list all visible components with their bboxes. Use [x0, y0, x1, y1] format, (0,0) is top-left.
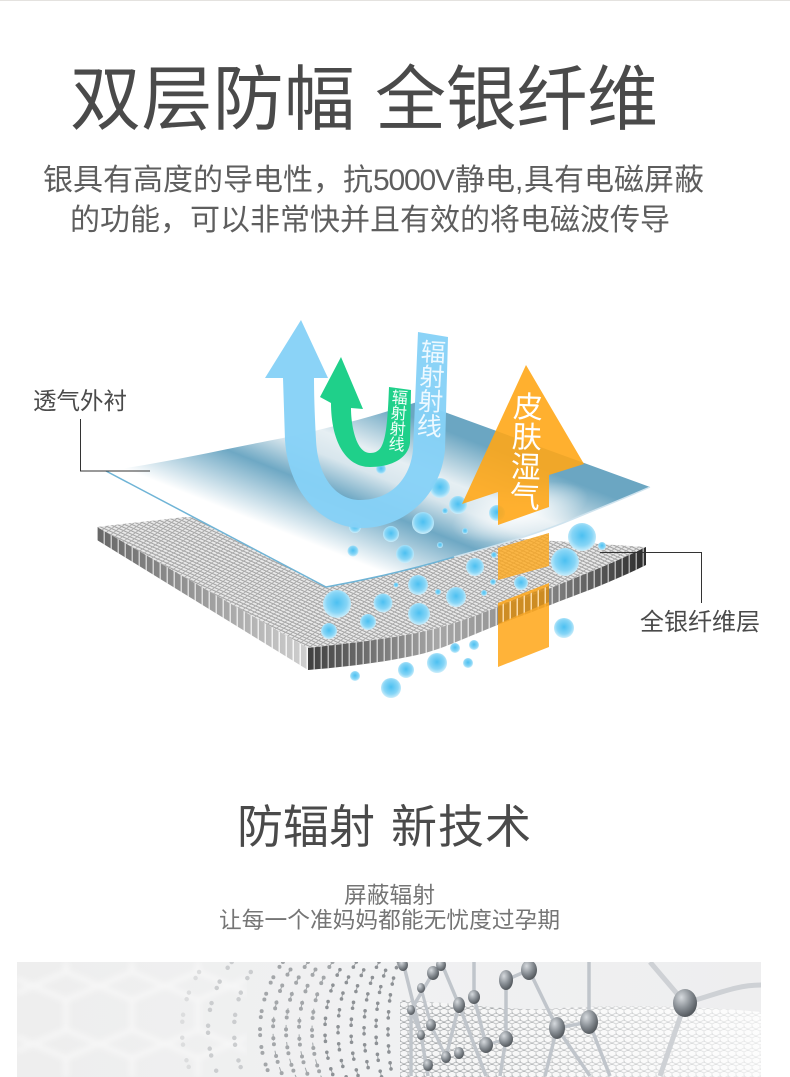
- title: 双层防幅: [70, 61, 355, 140]
- section subtext: 屏蔽辐射: [344, 882, 435, 908]
- arrow: blue radiation U-turn: 辐射射线: [413, 338, 446, 439]
- top edge strip: [0, 0, 790, 1]
- left tube concentric rings: mid atoms: [260, 962, 332, 1077]
- right tube lattice: [400, 1000, 761, 1077]
- arrow: green radiation U-turn: 辐射射线: [385, 388, 408, 453]
- left tube concentric rings: faint atoms: [182, 962, 258, 1077]
- foreground atoms: [398, 959, 697, 1071]
- label: breathable lining: 透气外衬: [33, 388, 127, 414]
- left tube concentric rings: dark atoms: [325, 962, 398, 1077]
- section heading: 新技术: [391, 801, 531, 853]
- label: breathable lining: [33, 388, 150, 471]
- label: silver fiber layer: [600, 552, 760, 636]
- layer: breathable lining sheet: [106, 402, 650, 587]
- label: silver fiber layer: 全银纤维层: [640, 609, 760, 636]
- arrow: blue radiation U-turn: [265, 320, 448, 528]
- foreground bonds: [403, 962, 761, 1076]
- section heading: 防辐射: [237, 801, 375, 853]
- arrow: orange skin moisture: [462, 365, 584, 525]
- description text: [43, 164, 704, 237]
- title: 全银纤维: [375, 61, 658, 140]
- bubbles on sheet: [348, 464, 505, 563]
- description text: 5000V: [373, 164, 455, 197]
- orange arrow lower shaft: [498, 533, 549, 667]
- description text: 银具有高度的导电性，抗: [43, 164, 373, 197]
- section subtext: 让每一个准妈妈都能无忧度过孕期: [219, 907, 560, 933]
- description text: 的功能，可以非常快并且有效的将电磁波传导: [70, 204, 670, 237]
- arrow: orange skin moisture: 皮肤湿气: [504, 390, 543, 512]
- description text: 具有电磁屏蔽: [524, 164, 704, 197]
- arrow: green radiation U-turn: [320, 357, 411, 467]
- image: carbon nanotube structure: [17, 959, 761, 1077]
- left tube concentric rings: bonds: [273, 962, 398, 1077]
- section subtext: [219, 882, 560, 933]
- bubbles below sheet: [321, 523, 606, 698]
- layer: silver fiber mesh: [97, 517, 646, 670]
- description text: 静电,: [455, 164, 523, 197]
- diagram: fabric layers: [97, 320, 650, 698]
